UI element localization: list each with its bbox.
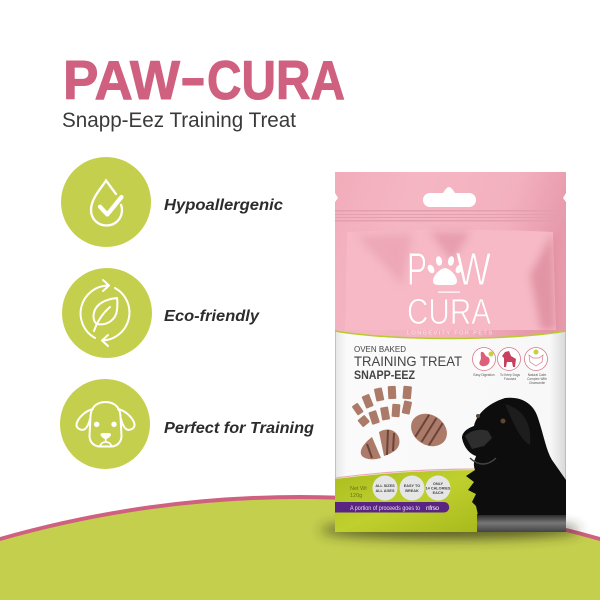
pack logo: PAW: P [407, 243, 427, 295]
icon: dog face [60, 379, 150, 469]
pack: purple charity banner: A portion of proceeds goes to [350, 506, 421, 512]
pack: lime lower section [335, 470, 480, 532]
treat: whole round piece [405, 407, 453, 453]
title: - [180, 46, 206, 108]
icon: water drop with check [61, 157, 151, 247]
pack: net weight: Net Wt [350, 486, 367, 492]
pack: grey base of dark half [477, 514, 566, 532]
pack heading text: TRAINING TREAT [354, 353, 462, 369]
label: perfect for training: Perfect for Training [164, 420, 314, 437]
pack logo: PAW [407, 243, 491, 295]
pack: purple charity banner: nfrso [426, 505, 439, 512]
pack: round claims: ALL SIZES [375, 484, 395, 488]
pack: round claims: EACH [433, 491, 444, 495]
feature: hypoallergenic [61, 157, 283, 247]
pack benefit badges: Focused [504, 377, 516, 381]
pack benefit badges: Complex With [527, 377, 547, 381]
feature: perfect for training [60, 379, 314, 469]
pack heading text: OVEN BAKED [354, 344, 406, 354]
pack benefit badges: To Keep Dogs [500, 373, 520, 377]
feature: eco-friendly [62, 268, 260, 358]
label: eco-friendly: Eco-friendly [164, 308, 260, 325]
pack: round claims: 14 CALORIES [426, 486, 451, 490]
pack: round claims [372, 476, 451, 500]
pack: white middle section [335, 331, 566, 480]
dog photo silhouette [462, 398, 566, 515]
pack: purple charity banner [335, 502, 449, 512]
pack tagline: LONGEVITY FOR PETS [407, 330, 492, 336]
treat: broken half pieces [361, 430, 399, 459]
pack: round claims: EASY TO [404, 484, 420, 488]
pack: net weight [350, 486, 367, 499]
pack logo: CURA: CURA [407, 291, 491, 332]
subtitle: Snapp-Eez Training Treat [62, 109, 296, 132]
pack benefit badges [472, 348, 548, 385]
pack: round claims: ONLY [433, 482, 444, 486]
icon: paw print [426, 256, 464, 285]
pack heading text [354, 344, 462, 382]
title: PAW [63, 49, 180, 111]
pack: round claims: ALL AGES [376, 489, 395, 493]
product pack [335, 171, 566, 532]
pack benefit badges: Chamomile [529, 381, 545, 385]
label: hypoallergenic: Hypoallergenic [164, 197, 283, 214]
pack benefit badges: Easy Digestion [473, 373, 495, 377]
title [63, 46, 345, 111]
icon: leaf with circular arrows [62, 268, 152, 358]
title: CURA [207, 49, 345, 111]
pack: pink upper section [335, 171, 566, 343]
pack: round claims: BREAK [405, 489, 419, 493]
pack logo: PAW: W [456, 243, 491, 295]
pack shadow [320, 521, 580, 539]
pack benefit badges: Natural Calm [528, 373, 547, 377]
treats: broken pieces [352, 386, 453, 459]
pack: net weight: 120g [350, 493, 362, 499]
pack heading text: SNAPP-EEZ [354, 370, 415, 382]
pack: hang hole [423, 187, 476, 207]
ground: green hill with pink rim [0, 495, 600, 600]
